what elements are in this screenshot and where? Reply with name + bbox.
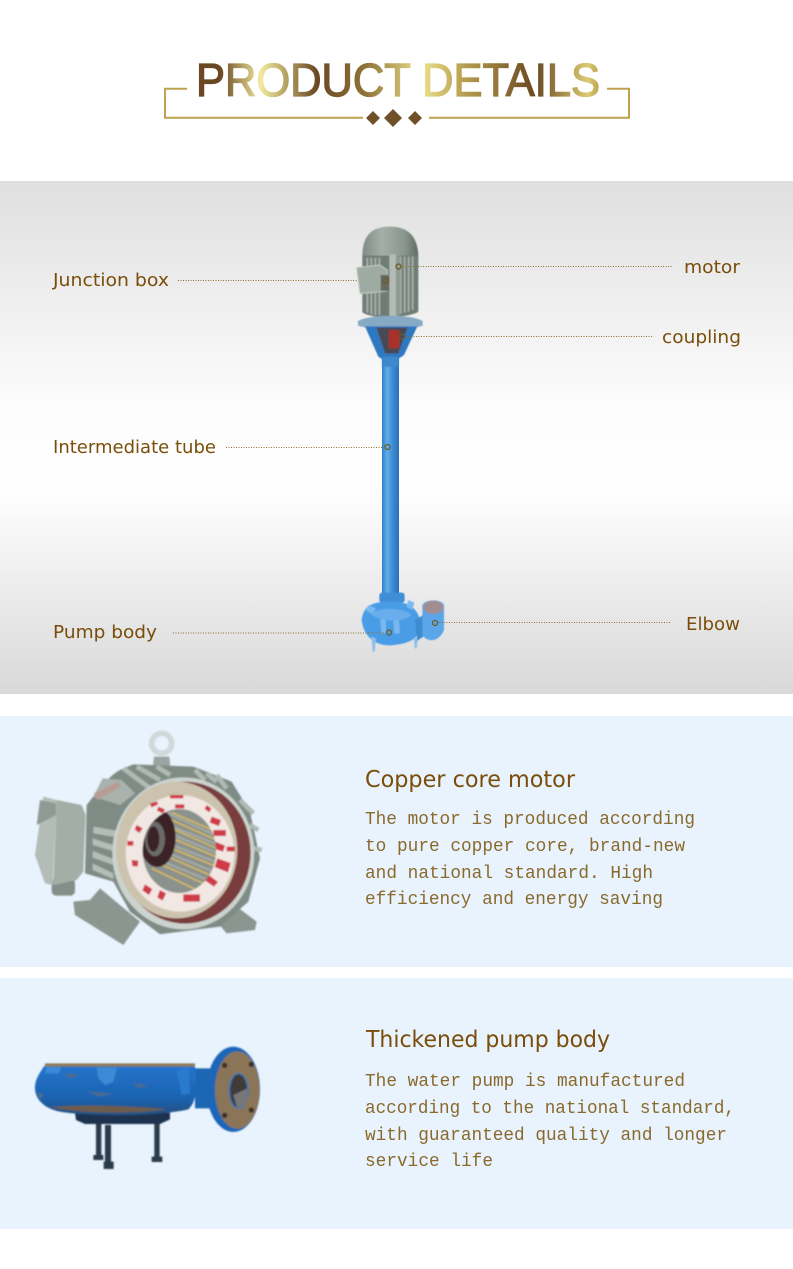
label: coupling: coupling <box>662 327 741 348</box>
pump description: with guaranteed quality and longer <box>365 1126 727 1146</box>
pump panel background <box>0 978 793 1229</box>
label: intermediate tube: Intermediate tube <box>53 437 216 458</box>
pump description: The water pump is manufactured <box>365 1072 685 1092</box>
label: motor: motor <box>684 257 741 278</box>
pump body and elbow <box>362 593 444 652</box>
heading: thickened pump body: Thickened pump body <box>365 1027 610 1053</box>
photo: pump casing <box>35 1047 260 1169</box>
label: junction box: Junction box <box>52 270 169 291</box>
pump description: according to the national standard, <box>365 1099 735 1119</box>
title frame <box>165 89 629 118</box>
label: pump body: Pump body <box>53 622 157 643</box>
motor description <box>365 810 695 910</box>
heading: copper core motor: Copper core motor <box>365 767 576 793</box>
panel: thickened pump body <box>0 978 793 1229</box>
pump tube <box>382 355 399 595</box>
motor assembly <box>357 227 423 367</box>
vertical pump illustration <box>357 227 444 652</box>
motor description: and national standard. High <box>365 864 653 884</box>
pump description <box>365 1072 735 1172</box>
diagram background <box>0 181 793 694</box>
pump description: service life <box>365 1152 493 1172</box>
marker rings <box>384 264 438 635</box>
motor description: to pure copper core, brand-new <box>365 837 685 857</box>
label: elbow: Elbow <box>686 614 740 635</box>
title block <box>165 54 629 127</box>
title text: PRODUCT DETAILS <box>196 54 600 106</box>
motor description: The motor is produced according <box>365 810 695 830</box>
motor panel background <box>0 716 793 967</box>
leader lines <box>173 266 672 633</box>
panel: copper core motor <box>0 716 793 967</box>
photo: stator motor <box>35 733 262 945</box>
title diamonds <box>366 109 422 127</box>
panel: pump diagram <box>0 181 793 694</box>
motor description: efficiency and energy saving <box>365 890 663 910</box>
